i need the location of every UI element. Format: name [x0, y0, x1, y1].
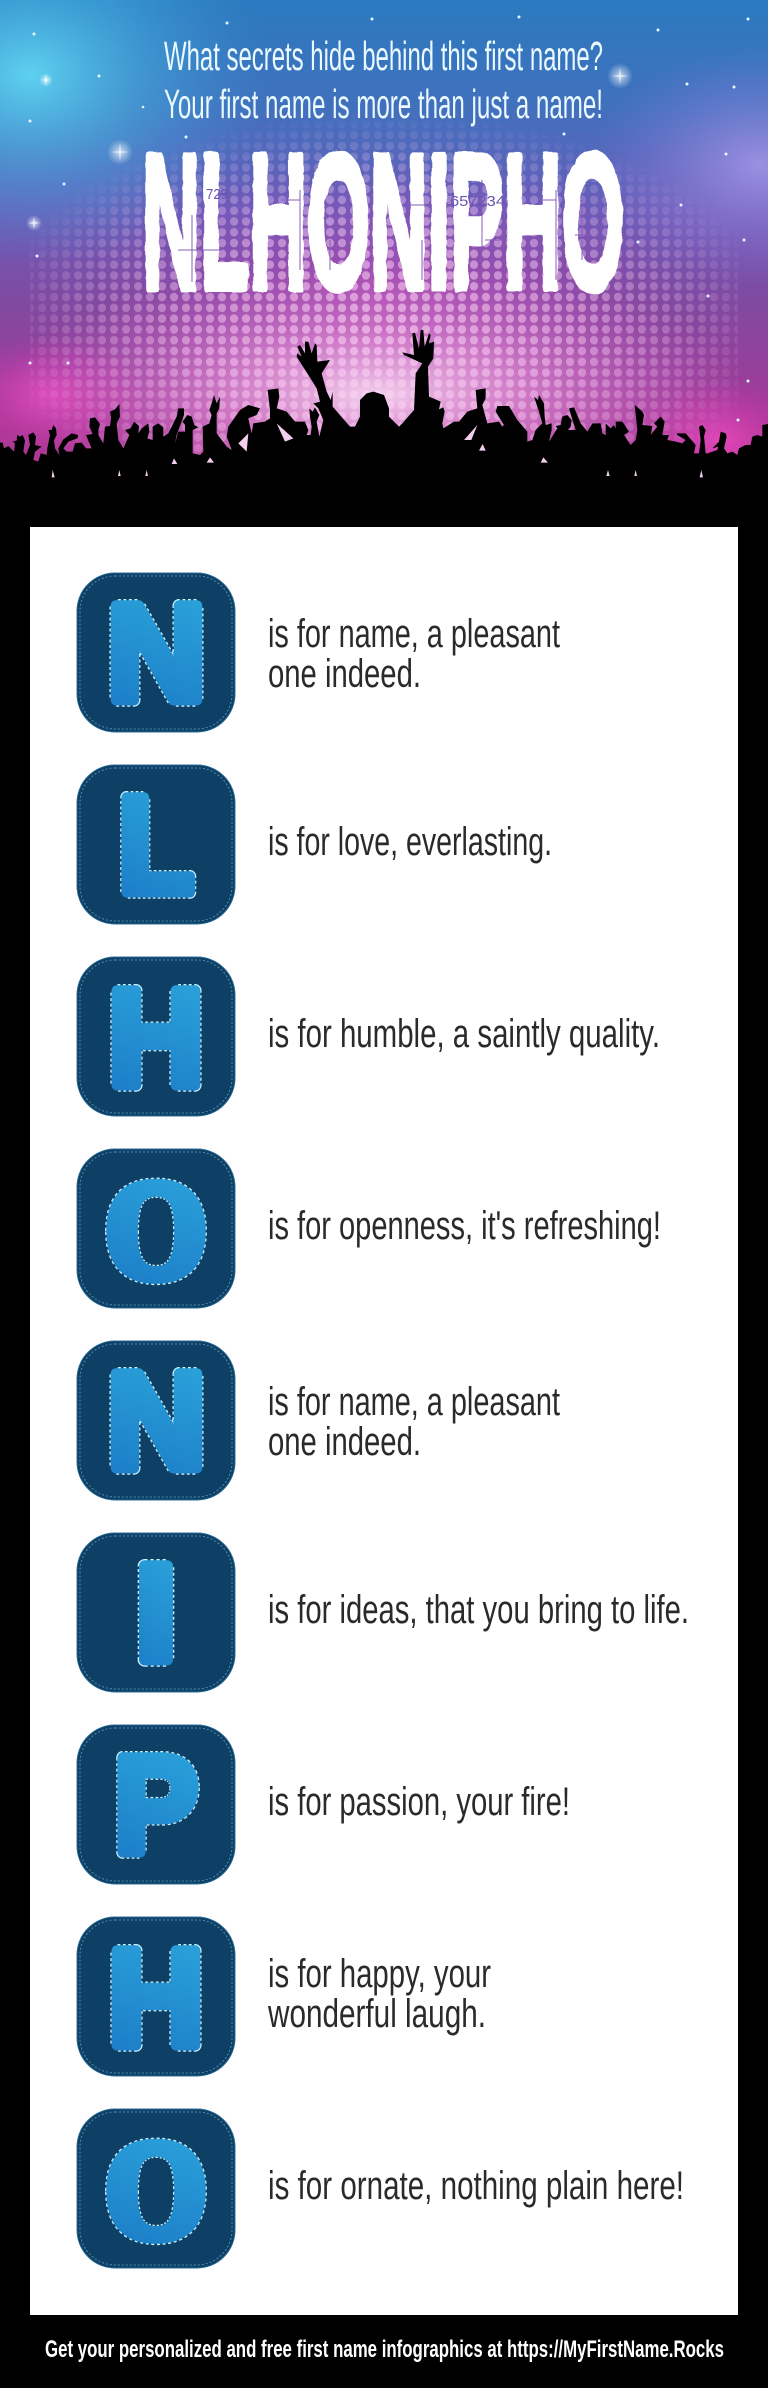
text: N second meaning: is for name, a pleasant [268, 1380, 560, 1424]
white content panel [30, 527, 738, 2315]
icon: letter H second: H [108, 1922, 204, 2075]
icon: letter P [77, 1725, 235, 1884]
icon: letter H: H [108, 962, 204, 1115]
row: N [77, 573, 560, 732]
icon: letter H: H [108, 962, 204, 1115]
name title: 729 [206, 186, 228, 203]
hero banner [0, 0, 768, 530]
icon: letter O second: O [105, 2113, 207, 2268]
icon: letter L: L [118, 769, 194, 922]
icon: letter I [77, 1533, 235, 1692]
text: N meaning: one indeed. [268, 652, 421, 696]
icon: letter N second: N [107, 1345, 206, 1498]
text: H second meaning: wonderful laugh. [267, 1992, 486, 2036]
crowd silhouette [0, 330, 768, 500]
name title: 657234 [450, 193, 505, 210]
icon: letter N second [77, 1341, 235, 1500]
row: P [77, 1725, 570, 1884]
text: L meaning: is for love, everlasting. [268, 820, 552, 864]
icon: letter N: N [107, 577, 206, 730]
row: O [77, 1149, 661, 1308]
icon: letter I: I [135, 1537, 177, 1690]
icon: letter N: N [107, 577, 206, 730]
text: N meaning [268, 612, 560, 696]
icon: letter H second: H [108, 1922, 204, 2075]
text: N meaning: is for name, a pleasant [268, 612, 560, 656]
row: O second [77, 2109, 684, 2268]
icon: letter L: L [118, 769, 194, 922]
icon: letter H [77, 957, 235, 1116]
tagline [164, 33, 603, 127]
text: N second meaning [268, 1380, 560, 1464]
row: H second [77, 1917, 491, 2076]
icon: letter P: P [114, 1729, 198, 1882]
row: H [77, 957, 660, 1116]
icon: letter P: P [114, 1729, 198, 1882]
text: N second meaning: one indeed. [268, 1420, 421, 1464]
icon: letter N second: N [107, 1345, 206, 1498]
icon: letter O: O [105, 1153, 207, 1308]
row: I [77, 1533, 689, 1692]
icon: letter I: I [135, 1537, 177, 1690]
text: P meaning: is for passion, your fire! [268, 1780, 570, 1824]
row: N second [77, 1341, 560, 1500]
crowd light gaps [52, 423, 703, 477]
icon: letter L [77, 765, 235, 924]
icon: letter N [77, 573, 235, 732]
sparkle flares [26, 63, 633, 231]
text: H second meaning: is for happy, your [268, 1952, 491, 1996]
sparkle stars [28, 16, 750, 422]
text: H second meaning [267, 1952, 491, 2036]
hero background [0, 0, 768, 462]
icon: letter O: O [105, 1153, 207, 1308]
icon: letter O [77, 1149, 235, 1308]
icon: letter O second: O [105, 2113, 207, 2268]
row: L [77, 765, 552, 924]
icon: letter H second [77, 1917, 235, 2076]
icon: letter O second [77, 2109, 235, 2268]
